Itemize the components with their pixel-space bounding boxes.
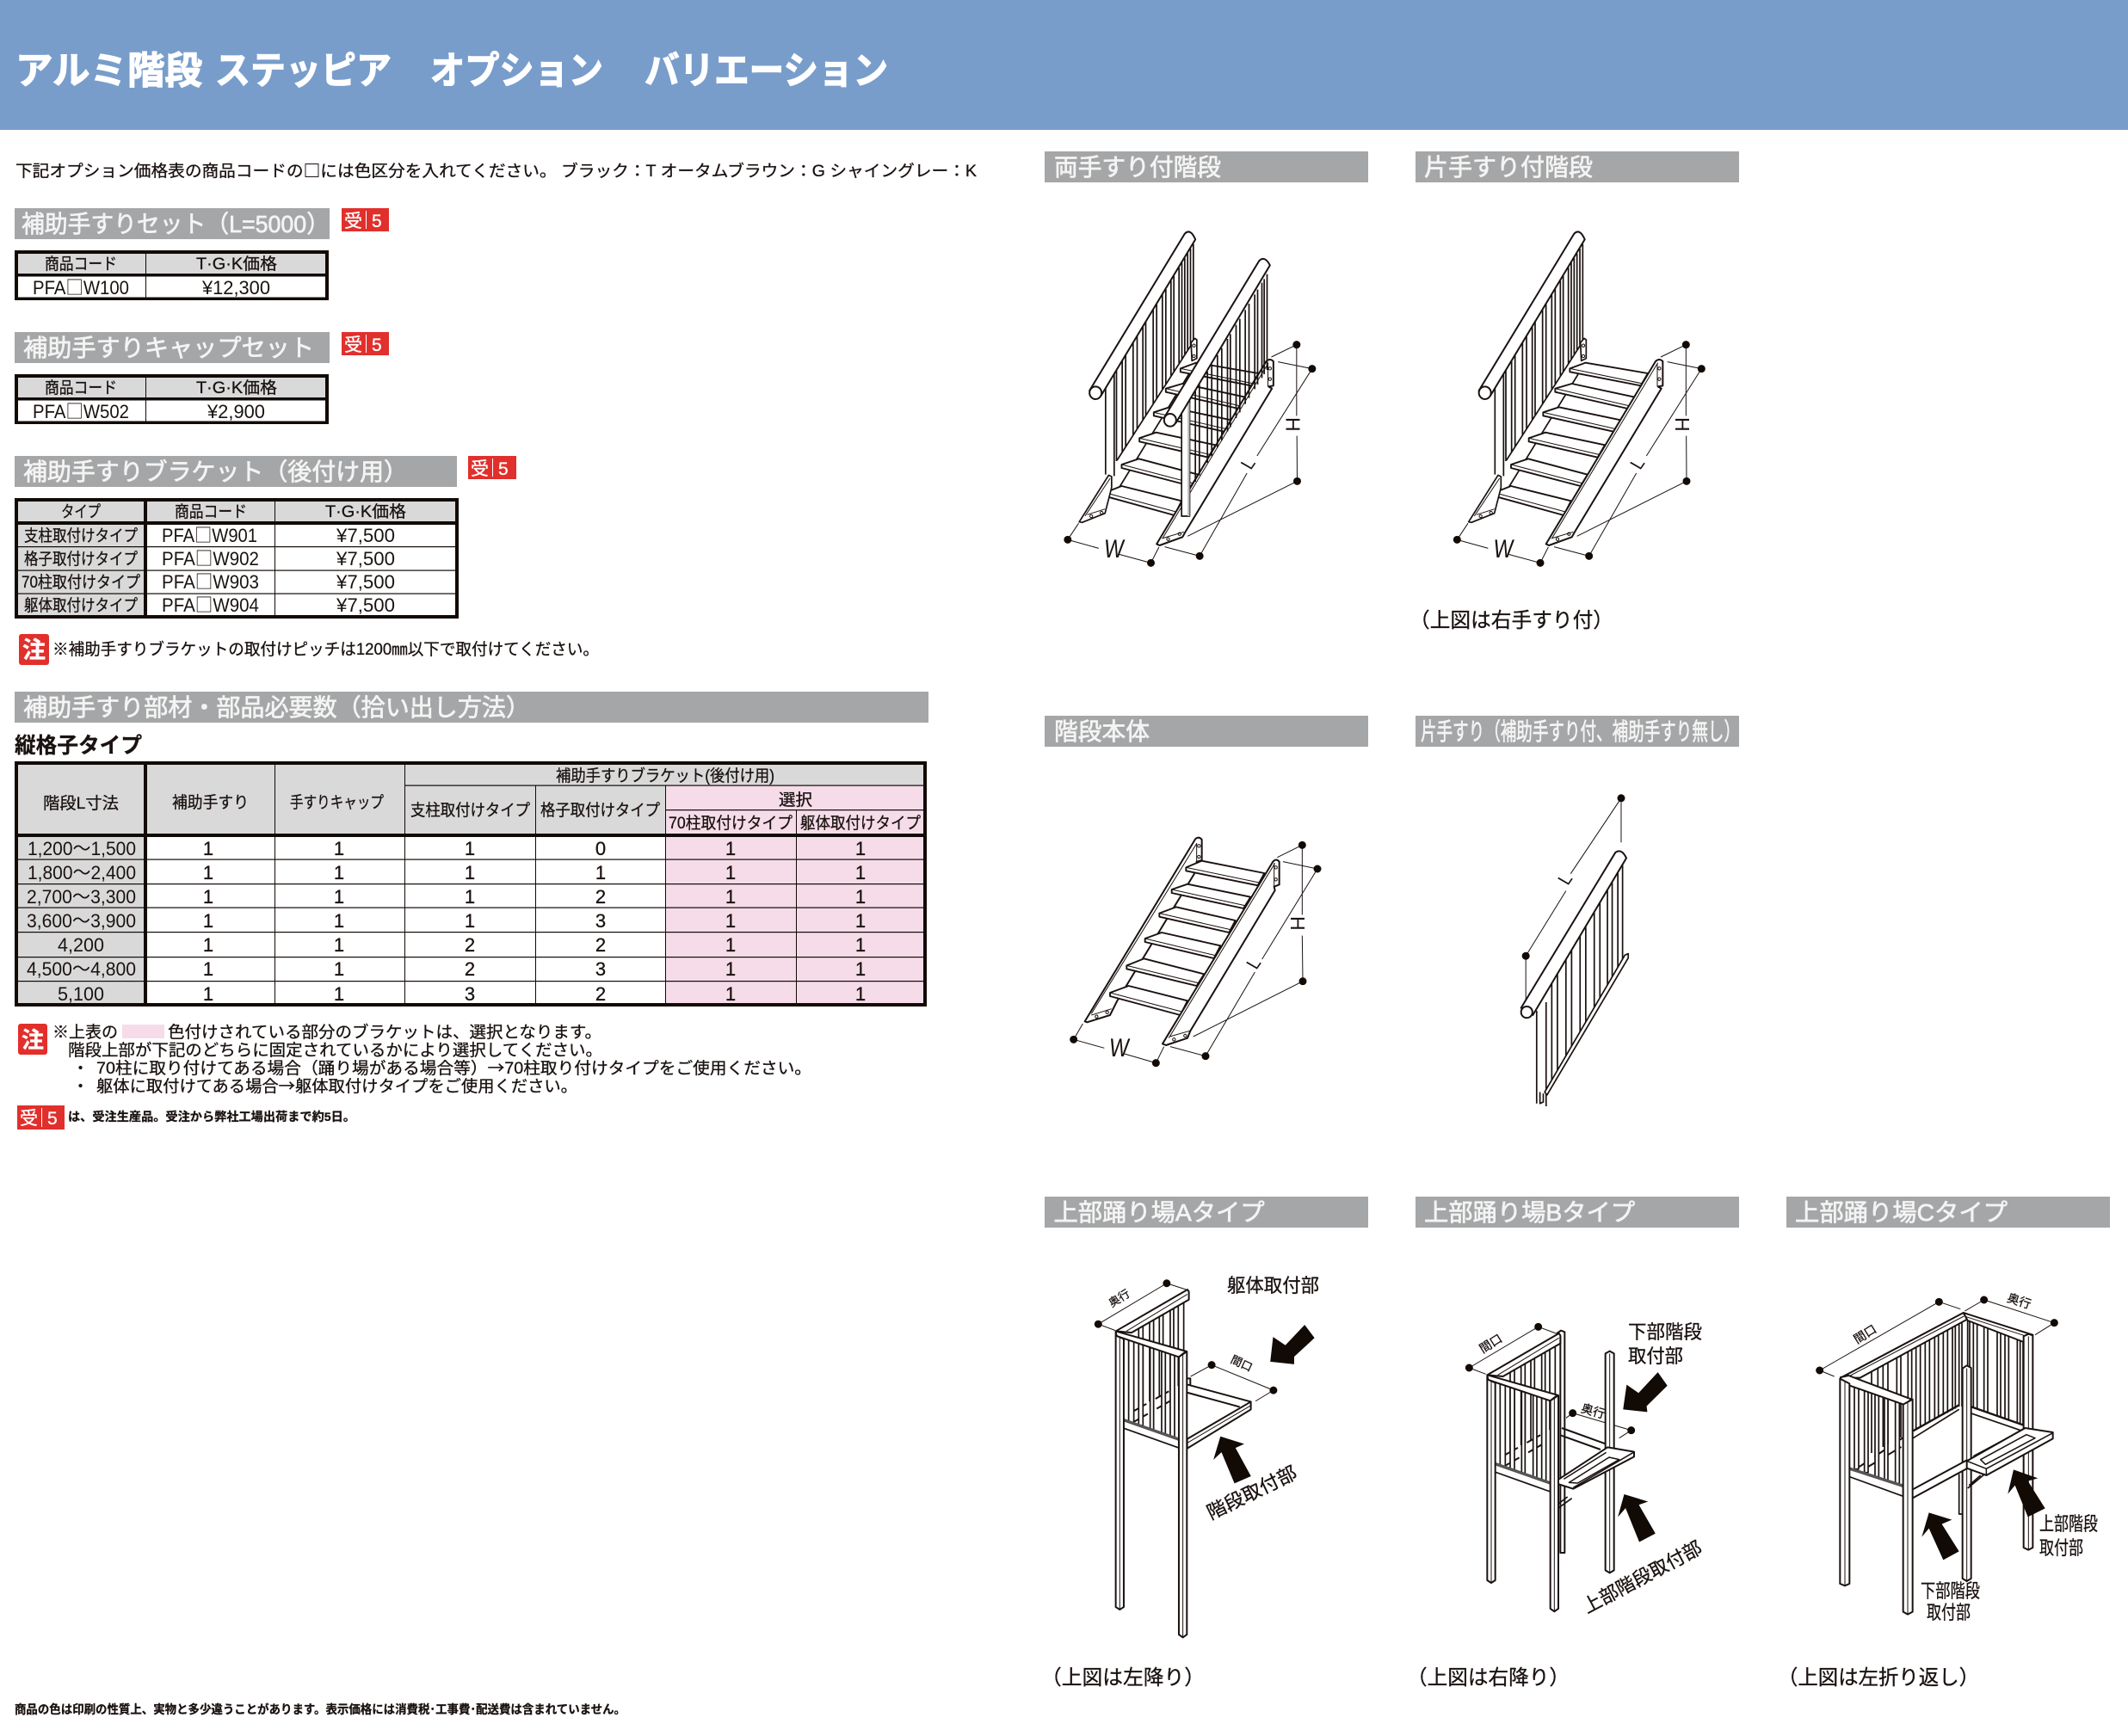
panel: handrail brackets: 受 (471, 459, 489, 479)
table: required parts by stair length: 1 (334, 983, 344, 1005)
table: required parts by stair length: 2 (465, 958, 475, 980)
table: required parts by stair length: 1 (465, 838, 475, 859)
heading: handrail only: 片手すり（補助手すり付、補助手すり無し） (1421, 718, 1740, 745)
dimension lines (1098, 1284, 1274, 1401)
diagram: landing type A frame (1116, 1290, 1251, 1637)
deck rear rails (1560, 1428, 1606, 1450)
table: required parts by stair length: 補助手すりブラケット(後付け用) (556, 766, 774, 785)
table: required parts by stair length: 2,700～3,300 (27, 886, 136, 908)
right stringer (1157, 360, 1274, 545)
rear post (1557, 1331, 1564, 1553)
rear top rail (1487, 1333, 1560, 1376)
treads (1495, 363, 1648, 515)
table: required parts by stair length: 3 (595, 910, 606, 932)
panel heading: required parts (15, 692, 928, 723)
note: bracket pitch (19, 634, 599, 665)
heading: landing type C (1786, 1197, 2110, 1228)
note: optional brackets: 70柱に取り付けてある場合（踊り場がある場合等） →70柱取り付けタイプをご使用ください。 (96, 1056, 811, 1079)
intro text: 下記オプション価格表の商品コードの □には色区分を入れてください。 ブラック：T オータムブラウン：G シャイングレー：K (15, 158, 977, 182)
note: optional brackets: ・ (72, 1060, 89, 1078)
table: required parts by stair length: 躯体取付けタイプ (800, 814, 921, 833)
panel: handrail cap set: 商品コード (45, 379, 117, 397)
dimension labels: one handrail (1492, 417, 1693, 563)
panel: handrail set: 受 (344, 212, 362, 231)
subheading: vertical lattice type: 縦格子タイプ (15, 734, 142, 758)
dimension labels: both handrails: L (1237, 455, 1260, 473)
dimension dots (1469, 1327, 1631, 1431)
panel: handrail cap set: 5 (372, 336, 382, 355)
table: required parts by stair length: 1 (334, 934, 344, 956)
table: required parts by stair length: 手すりキャップ (290, 793, 384, 812)
panel: handrail set: PFA□W100 (33, 273, 129, 300)
table: required parts by stair length: 階段L寸法 (43, 794, 119, 813)
rear bottom rails (1913, 1405, 2024, 1431)
labels: landing type A: 奥行 (1107, 1287, 1132, 1309)
diagonal brace (1556, 1497, 1572, 1510)
rear pickets (1510, 1346, 1555, 1451)
front handrail tube (1164, 259, 1270, 423)
note: optional brackets (18, 1022, 811, 1097)
rear left post (1959, 1469, 1963, 1514)
corner post lines (1962, 1319, 1968, 1407)
posts (1487, 1376, 1496, 1583)
heading: stair body: 階段本体 (1054, 718, 1150, 745)
table: required parts by stair length: 1,800～2,400 (28, 862, 136, 883)
left stringer (1469, 475, 1501, 522)
table: required parts by stair length: 2 (465, 934, 475, 956)
labels: landing type B: 下部階段 (1628, 1321, 1702, 1343)
labels: landing type C: 奥行 (2006, 1290, 2032, 1311)
bottom rail (1545, 954, 1628, 1095)
upper left bracket (1191, 338, 1197, 360)
panel: handrail brackets: PFA□W901 (162, 520, 257, 548)
right panel pickets (1970, 1321, 2023, 1425)
table: required parts by stair length: 1 (725, 983, 736, 1005)
table: required parts by stair length: 0 (595, 838, 606, 859)
panel: handrail brackets: ¥7,500 (336, 548, 395, 569)
caption: left descent: （上図は左降り） (1041, 1666, 1205, 1690)
panel: handrail cap set: 受 (344, 336, 362, 355)
front pickets (1129, 1340, 1175, 1437)
rear top rail (1116, 1290, 1189, 1333)
table: required parts by stair length: 1,200～1,500 (28, 838, 136, 859)
labels: landing type B: 取付部 (1628, 1345, 1683, 1367)
dimension lines (1457, 345, 1701, 563)
left stringer (1085, 838, 1202, 1022)
dimension lines (1469, 1327, 1631, 1438)
rail tube (1521, 851, 1626, 1015)
left balusters (1106, 244, 1194, 476)
table: required parts by stair length: 1 (855, 886, 866, 908)
left handrail tube (1089, 231, 1195, 396)
table: required parts by stair length: 1 (725, 862, 736, 883)
table: required parts by stair length: 1 (855, 958, 866, 980)
panel: handrail brackets: タイプ (61, 502, 101, 521)
panel: handrail brackets: PFA□W903 (162, 567, 259, 594)
top rails (1841, 1313, 1968, 1378)
table: required parts by stair length: 1 (725, 958, 736, 980)
table: required parts by stair length: 2 (595, 934, 606, 956)
labels: landing type C: 取付部 (2039, 1537, 2083, 1559)
dimension labels: stair body: H (1286, 916, 1309, 931)
heading: one handrail (1416, 151, 1739, 182)
note: optional brackets: 注 (22, 1027, 44, 1053)
panel: handrail brackets: PFA□W904 (162, 590, 259, 618)
arrow: upper stair mount (2008, 1469, 2045, 1517)
arrow: lower stair mount (1623, 1372, 1668, 1412)
dimension labels: one handrail: H (1671, 417, 1693, 432)
dimension labels: stair body: W (1107, 1033, 1132, 1062)
title banner: オプション (430, 50, 603, 92)
heading: both handrails (1045, 151, 1368, 182)
stringer back line (1112, 341, 1194, 499)
balusters (1495, 244, 1582, 476)
table: required parts by stair length: 1 (595, 862, 606, 883)
table: required parts by stair length: 1 (334, 838, 344, 859)
right deck (1967, 1428, 2053, 1475)
front tall post (1181, 401, 1189, 516)
panel: handrail brackets (15, 456, 516, 619)
dimension labels: both handrails: W (1102, 534, 1126, 563)
labels: landing type C: 上部階段 (2039, 1513, 2098, 1535)
table: required parts by stair length: 1 (855, 862, 866, 883)
balusters (1537, 865, 1623, 1106)
table: required parts by stair length: 3 (465, 983, 475, 1005)
note: optional brackets: ※上表の (52, 1023, 118, 1042)
labels: landing type B: 上部階段取付部 (1579, 1536, 1705, 1617)
title banner (0, 0, 2128, 130)
table: required parts by stair length: 1 (203, 934, 213, 956)
tread front edges (1110, 867, 1259, 1012)
dimension lines (1068, 345, 1312, 563)
diagram: landing type B arrows (1618, 1372, 1668, 1542)
right stringer (1163, 859, 1280, 1045)
labels: landing type A: 階段取付部 (1203, 1462, 1300, 1524)
diagram: landing type B frame (1469, 1327, 1634, 1611)
front bottom rail (1846, 1467, 1903, 1496)
table: required parts by stair length: 1 (334, 862, 344, 883)
table: required parts by stair length: 1 (203, 862, 213, 883)
arrow: upper stair mount (1618, 1494, 1656, 1542)
table: required parts by stair length: 1 (203, 958, 213, 980)
legend: made-to-order badge: 5 (47, 1109, 58, 1129)
front pickets (1500, 1384, 1546, 1481)
front top rail (1487, 1375, 1557, 1400)
dimension dots (1098, 1284, 1274, 1390)
caption: right handrail: （上図は右手すり付） (1409, 609, 1613, 632)
panel: handrail cap set: T·G·K価格 (196, 379, 277, 397)
dimension dots (1820, 1300, 2054, 1370)
dimension dots (1457, 345, 1701, 563)
left stringer (1079, 475, 1112, 522)
table: required parts by stair length: 1 (725, 934, 736, 956)
note: optional brackets: ・ (72, 1078, 89, 1096)
table: required parts by stair length: 1 (334, 910, 344, 932)
table: required parts by stair length: 1 (855, 983, 866, 1005)
deck (1555, 1447, 1634, 1489)
panel: handrail set: ¥12,300 (201, 277, 270, 299)
table: required parts by stair length: 1 (203, 838, 213, 859)
table: required parts by stair length: 1 (725, 886, 736, 908)
labels: landing type B (1477, 1321, 1705, 1617)
table: required parts by stair length: 1 (725, 838, 736, 859)
table: required parts by stair length: 70柱取付けタイプ (669, 814, 793, 833)
panel: handrail brackets: 70柱取付けタイプ (22, 573, 140, 592)
table: required parts by stair length: 2 (595, 983, 606, 1005)
footer note: 商品の色は印刷の性質上、実物と多少違うことがあります。表示価格には消費税･工事費･配送費は含まれていません。 (15, 1702, 626, 1716)
panel heading: required parts: 補助手すり部材・部品必要数（拾い出し方法） (23, 694, 530, 721)
dimension dots (1074, 845, 1317, 1063)
caption: left switchback: （上図は左折り返し） (1778, 1666, 1979, 1690)
dimension lines (1074, 845, 1317, 1063)
labels: landing type C: 取付部 (1927, 1602, 1971, 1623)
panel: handrail set: T·G·K価格 (196, 255, 277, 274)
panel: handrail brackets: 躯体取付けタイプ (24, 596, 138, 615)
table: required parts by stair length: 1 (465, 862, 475, 883)
right stringer (1546, 360, 1662, 545)
heading: handrail only (1416, 716, 1740, 747)
rear dashed rails (1133, 1386, 1179, 1421)
table: required parts by stair length: 1 (203, 983, 213, 1005)
diagram: landing type A dimensions and arrows (1098, 1284, 1315, 1483)
panel: handrail set (15, 208, 389, 300)
arrow: stair mount (1213, 1437, 1251, 1483)
note: bracket pitch: ※補助手すりブラケットの取付けピッチは1200㎜以下で取付けてください。 (52, 639, 599, 659)
heading: both handrails: 両手すり付階段 (1054, 154, 1221, 181)
treads (1105, 363, 1258, 515)
front top rail (1116, 1331, 1186, 1357)
front balusters (1195, 274, 1267, 482)
labels: landing type B: 奥行 (1580, 1401, 1607, 1421)
panel: handrail cap set: ¥2,900 (207, 401, 265, 422)
arrow: structure mount (1270, 1325, 1315, 1364)
panel: handrail brackets: ¥7,500 (336, 594, 395, 616)
table: required parts by stair length: 1 (465, 886, 475, 908)
table: required parts by stair length: 1 (203, 910, 213, 932)
panel: handrail set: 5 (372, 212, 382, 231)
labels: landing type C: 下部階段 (1921, 1580, 1980, 1602)
center post (1963, 1365, 1971, 1581)
table: required parts by stair length: 格子取付けタイプ (540, 801, 660, 820)
heading: one handrail: 片手すり付階段 (1424, 154, 1593, 181)
tread front edges (1105, 368, 1252, 512)
upper left bracket (1581, 338, 1586, 360)
panel: handrail brackets: 格子取付けタイプ (24, 550, 138, 569)
dimension labels: both handrails (1102, 417, 1305, 563)
arrow: lower stair mount (1921, 1512, 1959, 1560)
dimension label: handrail only: L (1554, 871, 1577, 889)
note: optional brackets: 階段上部が下記のどちらに固定されているかにより選択してください。 (68, 1041, 602, 1060)
long front rail (1912, 1460, 1968, 1499)
labels: landing type C: 間口 (1851, 1322, 1878, 1346)
diagram: handrail only (1521, 798, 1628, 1106)
table: required parts by stair length: 2 (595, 886, 606, 908)
heading: landing type B (1416, 1197, 1739, 1228)
table: required parts by stair length (15, 761, 927, 1007)
panel: handrail brackets: PFA□W902 (162, 544, 259, 571)
panel: handrail cap set (15, 332, 389, 424)
legend: made-to-order badge: 受 (20, 1109, 38, 1129)
rear pickets (1138, 1302, 1184, 1407)
table: required parts by stair length: 支柱取付けタイプ (410, 801, 530, 820)
panel: handrail cap set: PFA□W502 (33, 397, 129, 424)
diagonal brace (1968, 1474, 1985, 1488)
table: required parts by stair length: 1 (855, 838, 866, 859)
panel: handrail brackets: ¥7,500 (336, 571, 395, 593)
deck front rail (1187, 1401, 1251, 1449)
handrail tube (1479, 231, 1585, 396)
tread front edges (1495, 368, 1642, 512)
table: required parts by stair length: 補助手すり (172, 793, 249, 812)
diagram: stair with both handrails (1068, 231, 1312, 563)
note: optional brackets: 躯体に取付けてある場合→躯体取付けタイプをご使用ください。 (96, 1074, 577, 1097)
panel: handrail brackets: 支柱取付けタイプ (24, 526, 138, 545)
table: required parts by stair length: 1 (465, 910, 475, 932)
panel: handrail cap set: 補助手すりキャップセット (23, 335, 314, 361)
diagram: landing type C (1820, 1300, 2054, 1615)
title banner: ステッピア (215, 50, 392, 92)
right rear post (2024, 1334, 2032, 1550)
table: required parts by stair length: 3,600～3,900 (27, 910, 136, 932)
labels: landing type A: 躯体取付部 (1227, 1275, 1319, 1296)
right post (1606, 1351, 1614, 1573)
panel: handrail set: 商品コード (45, 255, 117, 274)
panel: handrail brackets: 補助手すりブラケット（後付け用） (23, 459, 408, 485)
dimension lines (1526, 798, 1621, 1002)
heading: landing type A (1045, 1197, 1368, 1228)
legend: made-to-order badge: は、受注生産品。受注から弊社工場出荷まで約5日。 (68, 1110, 355, 1123)
rear pickets (1872, 1323, 1959, 1453)
deck rear rails (1187, 1378, 1251, 1407)
front top rail (1841, 1376, 1912, 1405)
table: required parts by stair length: 選択 (779, 791, 812, 810)
table: required parts by stair length: 4,200 (58, 934, 104, 956)
table: required parts by stair length: 1 (334, 958, 344, 980)
table: required parts by stair length: 3 (595, 958, 606, 980)
dimension labels: stair body: L (1243, 955, 1266, 973)
dimension labels: stair body (1107, 916, 1309, 1062)
dimension lines (1820, 1300, 2054, 1376)
table: required parts by stair length: 1 (725, 910, 736, 932)
panel: handrail brackets: 商品コード (175, 502, 247, 521)
caption: right descent: （上図は右降り） (1407, 1666, 1570, 1690)
posts (1116, 1333, 1124, 1610)
note: bracket pitch: 注 (22, 637, 46, 663)
labels: landing type C (1851, 1290, 2098, 1623)
panel: handrail brackets: 5 (498, 459, 509, 479)
labels: landing type A: 間口 (1229, 1353, 1255, 1374)
labels: landing type B: 間口 (1477, 1332, 1504, 1356)
table: required parts by stair length: 1 (855, 910, 866, 932)
front pickets (1854, 1388, 1899, 1484)
dimension dots (1526, 798, 1621, 956)
front bottom rail (1492, 1462, 1551, 1492)
heading: landing type C: 上部踊り場Cタイプ (1795, 1199, 2008, 1226)
posts (1840, 1379, 1849, 1585)
table: required parts by stair length: 1 (855, 934, 866, 956)
dimension dots (1068, 345, 1312, 563)
table: required parts by stair length: 4,500～4,800 (27, 958, 136, 980)
treads (1110, 861, 1264, 1015)
note: optional brackets: 色付けされている部分のブラケットは、選択となります。 (168, 1022, 601, 1042)
title banner: アルミ階段 (15, 50, 202, 92)
rear dashed rails (1504, 1430, 1551, 1465)
dimension labels: one handrail: L (1626, 455, 1650, 473)
panel: handrail brackets: ¥7,500 (336, 525, 395, 546)
rear dashed rails (1853, 1437, 1904, 1471)
heading: landing type B: 上部踊り場Bタイプ (1424, 1199, 1635, 1226)
panel: handrail set: 補助手すりセット（L=5000） (22, 211, 330, 237)
dimension labels: both handrails: H (1282, 417, 1305, 432)
front bottom rail (1121, 1419, 1179, 1448)
stringer back line (1502, 341, 1583, 499)
title banner: バリエーション (645, 50, 888, 92)
table: required parts by stair length: 1 (334, 886, 344, 908)
diagram: stair body (1074, 838, 1317, 1063)
table: required parts by stair length: 5,100 (58, 983, 104, 1005)
heading: landing type A: 上部踊り場Aタイプ (1053, 1199, 1265, 1226)
legend: made-to-order badge (17, 1105, 355, 1130)
labels: landing type A (1107, 1275, 1319, 1524)
heading: stair body (1045, 716, 1368, 747)
panel: handrail brackets: T·G·K価格 (325, 502, 406, 521)
diagram: stair with one handrail (1457, 231, 1701, 563)
table: required parts by stair length: 1 (203, 886, 213, 908)
dimension labels: one handrail: W (1492, 534, 1515, 563)
